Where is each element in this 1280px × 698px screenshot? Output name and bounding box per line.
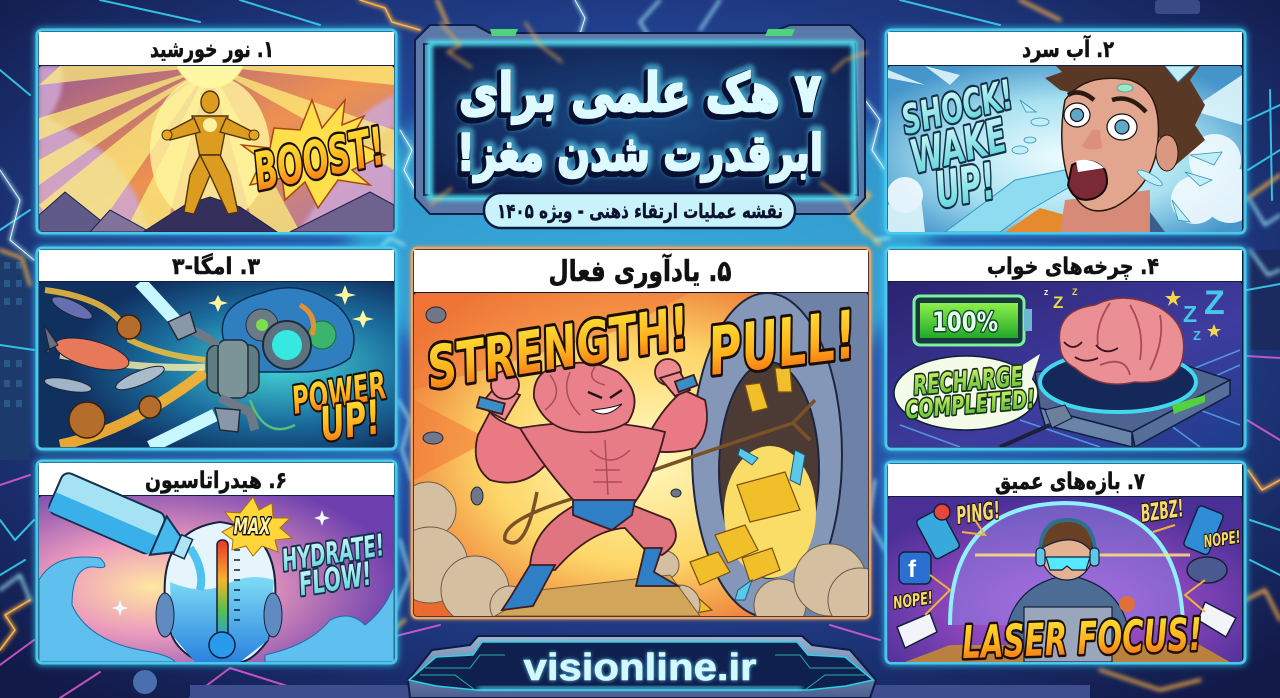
website text: visionline.ir bbox=[524, 647, 757, 689]
speech bubble: COMPLETED! bbox=[904, 384, 1036, 425]
flying rocks bbox=[423, 307, 681, 505]
panel 2: cold water bbox=[885, 29, 1258, 234]
water bottle overlapping the header bbox=[47, 471, 197, 569]
person bbox=[1005, 519, 1130, 662]
sleeping brain bbox=[1059, 298, 1184, 384]
MAX burst bbox=[222, 497, 292, 556]
neck bbox=[1060, 190, 1150, 232]
zzz: Z bbox=[1072, 287, 1078, 297]
heading bbox=[39, 463, 394, 495]
BOOST burst bbox=[242, 100, 385, 208]
heading: ۲. آب سرد bbox=[1022, 34, 1114, 63]
subtitle pill bbox=[484, 193, 795, 228]
panel 6: hydration bbox=[36, 460, 397, 664]
vault bbox=[775, 293, 868, 616]
right arm bbox=[648, 390, 707, 452]
speech bubble bbox=[894, 354, 1040, 430]
mouth bbox=[1068, 161, 1107, 200]
footer website banner bbox=[190, 636, 1090, 698]
illustration: person in focus bubble with blocked distractions: BZBZ! bbox=[1139, 494, 1185, 528]
zzz: Z bbox=[1044, 290, 1049, 297]
illustration: water filling a head with thermometer bbox=[39, 496, 394, 662]
illustration: fish and walnuts feeding a mechanical brain bbox=[39, 282, 394, 453]
HYDRATE FLOW text: FLOW! bbox=[296, 555, 374, 603]
left arm bbox=[476, 412, 548, 483]
battery 100%: 100% bbox=[932, 307, 998, 338]
STRENGTH and PULL text: STRENGTH! bbox=[422, 294, 694, 402]
panel 5: active recall bbox=[392, 247, 892, 632]
title frame bbox=[415, 22, 868, 235]
heading bbox=[888, 32, 1242, 65]
legs bbox=[530, 505, 676, 570]
heading bbox=[414, 250, 868, 292]
SHOCK WAKE UP text bbox=[901, 76, 1012, 210]
heading bbox=[888, 464, 1242, 496]
zzz bbox=[1044, 288, 1224, 340]
zzz: Z bbox=[1183, 301, 1197, 327]
zzz: Z bbox=[1204, 284, 1225, 322]
title line 1: ۷ هک علمی برای bbox=[459, 63, 821, 124]
title line 2: ابرقدرت شدن مغز! bbox=[457, 124, 823, 183]
illustration: person in focus bubble with blocked distractions: f bbox=[908, 556, 917, 583]
brain head bbox=[534, 363, 635, 432]
brows bbox=[1068, 92, 1094, 100]
face bbox=[588, 390, 622, 398]
HYDRATE FLOW text bbox=[280, 528, 387, 603]
illustration: brain charging on a wireless pad bbox=[888, 282, 1242, 447]
fish bbox=[43, 292, 167, 395]
illustration: shocked face splashed with water bbox=[887, 66, 1258, 232]
platform bbox=[1035, 360, 1230, 447]
title line 1: ۷ هک علمی برای bbox=[457, 66, 819, 127]
walnuts bbox=[69, 315, 161, 438]
head bbox=[165, 522, 275, 662]
zzz: Z bbox=[1193, 328, 1201, 343]
SHOCK WAKE UP text: WAKE bbox=[905, 108, 1012, 184]
zzz: Z bbox=[1053, 293, 1063, 312]
panel 4: sleep cycles bbox=[885, 247, 1246, 450]
SHOCK WAKE UP text: SHOCK! bbox=[897, 72, 1018, 144]
waves bbox=[39, 557, 175, 662]
heading: ۵. یادآوری فعال bbox=[548, 253, 732, 288]
heading: ۱. نور خورشید bbox=[150, 37, 274, 63]
thermometer bbox=[209, 540, 235, 658]
SHOCK WAKE UP text: UP! bbox=[931, 152, 1000, 220]
trunks bbox=[573, 500, 635, 530]
illustration: man on mountain in sunlight with BOOST: BOOST! bbox=[249, 117, 390, 203]
title line 1: ۷ هک علمی برای bbox=[459, 63, 821, 124]
panel 1: sunlight bbox=[36, 16, 397, 234]
website text: visionline.ir bbox=[524, 647, 757, 689]
title line 2: ابرقدرت شدن مغز! bbox=[455, 127, 821, 186]
phones, icons and distractions bbox=[897, 504, 1236, 648]
ear bbox=[1156, 135, 1178, 171]
heading: ۶. هیدراتاسیون bbox=[145, 468, 287, 494]
heading: ۴. چرخه‌های خواب bbox=[987, 254, 1159, 280]
dome bbox=[950, 503, 1183, 625]
plug bbox=[1045, 405, 1072, 428]
illustration: person in focus bubble with blocked distractions: NOPE! bbox=[892, 588, 934, 614]
heading: ۳. امگا-۳ bbox=[172, 253, 260, 280]
rope bbox=[505, 400, 815, 543]
heading: ۷. بازه‌های عمیق bbox=[995, 469, 1145, 495]
face bbox=[1062, 78, 1158, 211]
panel 7: deep focus bbox=[885, 461, 1246, 669]
mountains bbox=[39, 192, 394, 232]
illustration: muscular brain pulling open a vault bbox=[414, 293, 868, 616]
illustration: person in focus bubble with blocked distractions bbox=[888, 494, 1242, 669]
illustration: person in focus bubble with blocked distractions: NOPE! bbox=[1202, 528, 1242, 552]
POWER UP text bbox=[292, 369, 388, 443]
illustration: man on mountain in sunlight with BOOST bbox=[39, 66, 394, 232]
floor bbox=[495, 575, 700, 616]
HYDRATE FLOW text: HYDRATE! bbox=[280, 528, 387, 579]
heading bbox=[888, 250, 1242, 281]
muscular brain character bbox=[476, 359, 707, 610]
title line 2: ابرقدرت شدن مغز! bbox=[457, 124, 823, 183]
POWER UP text: POWER bbox=[289, 363, 390, 423]
heading bbox=[39, 32, 394, 65]
illustration: water filling a head with thermometer: MAX bbox=[234, 515, 271, 540]
POWER UP text: UP! bbox=[317, 390, 384, 453]
torso bbox=[520, 422, 665, 505]
hair back bbox=[1045, 66, 1205, 170]
boots bbox=[502, 565, 555, 610]
panel 3: omega-3 bbox=[36, 247, 397, 453]
golden figure bbox=[167, 91, 253, 214]
illustration: person in focus bubble with blocked distractions: PING! bbox=[954, 496, 1002, 530]
STRENGTH and PULL text: PULL! bbox=[704, 296, 860, 391]
eyes bbox=[1064, 103, 1137, 140]
battery 100% bbox=[914, 296, 1032, 345]
splash drops bbox=[1012, 66, 1222, 222]
brain bbox=[222, 288, 354, 372]
dust clouds bbox=[414, 482, 868, 616]
cannon and pipes bbox=[168, 312, 259, 432]
heading bbox=[39, 250, 394, 281]
subtitle pill: نقشه عملیات ارتقاء ذهنی - ویژه ۱۴۰۵ bbox=[497, 199, 783, 223]
speech bubble: RECHARGE bbox=[912, 361, 1025, 402]
shirt bbox=[1005, 208, 1065, 232]
